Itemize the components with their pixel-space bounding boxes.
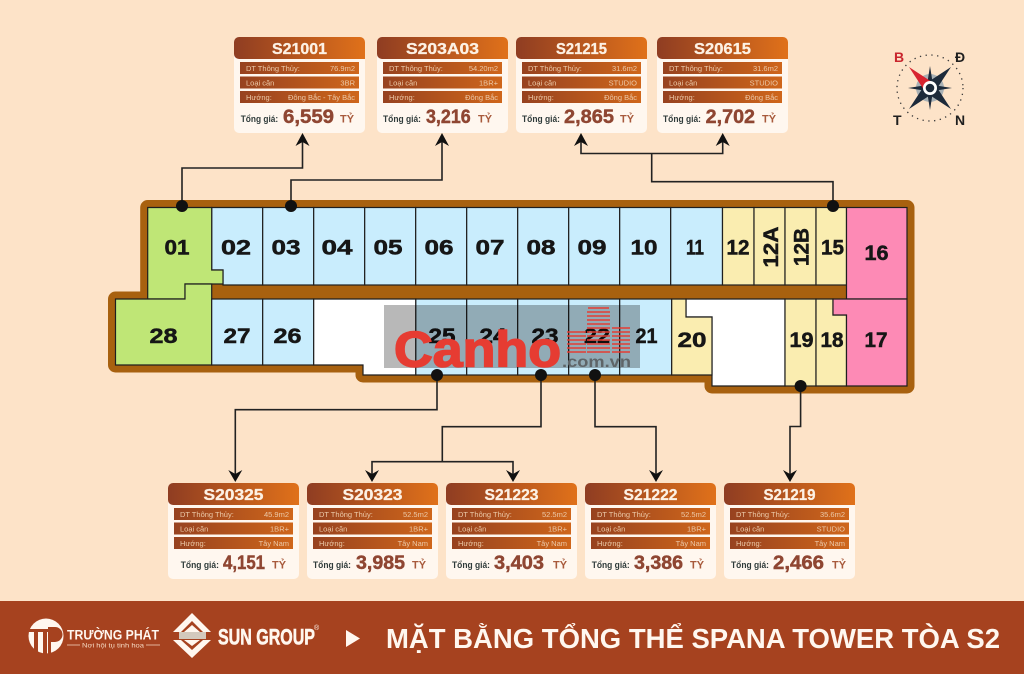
card: S21215: TỶ [620, 112, 635, 126]
card: S21215: S21215 [556, 41, 607, 58]
card: S21223: TỶ [553, 558, 568, 572]
unit numbers: 25 [428, 325, 456, 348]
card: S20325: DT Thông Thủy: [180, 510, 234, 519]
compass letter B: B [894, 49, 904, 65]
card: S21219: Tổng giá: [731, 560, 769, 570]
card: S21222: S21222 [624, 487, 678, 504]
card: S21219: Hướng: [736, 539, 762, 548]
connector: unit 25 to S20325 [228, 369, 443, 482]
connector: unit 23 to S20323 and S21223 [365, 369, 547, 482]
connector: unit 03 to S203A03 [285, 133, 449, 212]
card: S20615 [657, 37, 788, 133]
card: S21222: DT Thông Thủy: [597, 510, 651, 519]
floor plan: building [116, 208, 907, 386]
card: S21223: Hướng: [458, 539, 484, 548]
card: S203A03: S203A03 [406, 41, 479, 58]
logo: Sun Group: SUN GROUP [218, 624, 315, 650]
card: S20323: Tổng giá: [313, 560, 351, 570]
unit numbers: 07 [476, 236, 504, 260]
card: S20325: Tây Nam [259, 539, 289, 548]
compass letter N: N [955, 112, 965, 128]
unit numbers: 12A [760, 226, 783, 268]
card: S20325: Loại căn [180, 524, 208, 534]
rooms: green corner units 01 and 28 [116, 208, 223, 365]
unit numbers: 11 [686, 236, 704, 260]
watermark building stripes [567, 308, 630, 352]
card: S203A03: Tổng giá: [383, 114, 421, 124]
card: S20323: 3,985 [356, 553, 405, 574]
card: S20325: Hướng: [180, 539, 206, 548]
card: S20615: TỶ [762, 112, 777, 126]
card: S21001: S21001 [272, 41, 327, 58]
card: S21223: 52.5m2 [542, 510, 567, 519]
unit numbers: 16 [864, 242, 888, 265]
unit numbers: 21 [636, 325, 658, 348]
card: S203A03: DT Thông Thủy: [389, 64, 443, 73]
unit numbers: 08 [526, 236, 556, 260]
unit numbers [150, 226, 888, 352]
compass letter T: T [893, 112, 902, 128]
card: S21219: STUDIO [817, 524, 845, 534]
card: S21215: STUDIO [609, 78, 637, 88]
card: S20323: 52.5m2 [403, 510, 428, 519]
card: S21222: Tây Nam [676, 539, 706, 548]
building outer wall [116, 208, 907, 386]
card: S20615: STUDIO [750, 78, 778, 88]
logo: Trường Phát: TRƯỜNG PHÁT [67, 628, 160, 642]
card: S21215: Hướng: [528, 93, 554, 102]
card: S21223: Tổng giá: [452, 560, 490, 570]
card: S21215 [516, 37, 647, 133]
card: S21219: DT Thông Thủy: [736, 510, 790, 519]
logo: Sun Group [173, 613, 320, 658]
card: S21001: TỶ [340, 112, 355, 126]
unit numbers: 09 [578, 236, 606, 260]
card: S21001: Đông Bắc - Tây Bắc [288, 93, 355, 102]
footer title: MẶT BẰNG TỔNG THỂ SPANA TOWER TÒA S2 [386, 623, 1000, 654]
icon: compass rose [893, 49, 965, 128]
card: S20325: 45.9m2 [264, 510, 289, 519]
card: S21215: Tổng giá: [522, 114, 560, 124]
unit numbers: 17 [864, 329, 888, 352]
card: S21219: Loại căn [736, 524, 764, 534]
card: S20325: 1BR+ [270, 524, 290, 534]
card: S203A03: TỶ [478, 112, 493, 126]
logo: Trường Phát [28, 618, 160, 654]
card: S21215: Đông Bắc [604, 93, 637, 102]
card: S21222: Tổng giá: [592, 560, 630, 570]
card: S20615: Đông Bắc [745, 93, 778, 102]
card: S203A03: Đông Bắc [465, 93, 498, 102]
card: S203A03: Hướng: [389, 93, 415, 102]
white void areas [314, 299, 785, 386]
rooms row: bottom blue units [212, 299, 672, 375]
card: S21222: Loại căn [597, 524, 625, 534]
card: S21219: S21219 [764, 487, 816, 504]
logo: Sun Group: ® [314, 624, 320, 632]
footer band [0, 601, 1024, 674]
card: S20323: S20323 [342, 487, 403, 504]
card: S20325: 4,151 [223, 553, 265, 574]
card: S21222: Hướng: [597, 539, 623, 548]
card: S21215: DT Thông Thủy: [528, 64, 582, 73]
rooms: pink units 16 and 17 [833, 208, 907, 386]
card: S20615: 31.6m2 [753, 64, 778, 73]
unit numbers: 12 [726, 236, 750, 260]
card: S203A03: Loại căn [389, 78, 417, 88]
card: S20325: Tổng giá: [181, 560, 219, 570]
connector: unit 15 to S21215 and S20615 [574, 133, 839, 212]
compass letter Đ: Đ [955, 49, 965, 65]
card: S21001: 3BR [340, 78, 356, 88]
unit numbers: 20 [678, 329, 706, 352]
card: S21219: TỶ [832, 558, 847, 572]
unit numbers: 03 [272, 236, 300, 260]
card: S21222: TỶ [690, 558, 705, 572]
card: S21222: 1BR+ [687, 524, 707, 534]
unit numbers: 15 [821, 236, 844, 260]
unit numbers: 19 [790, 329, 814, 352]
card: S21223: Loại căn [458, 524, 486, 534]
connector: unit 01 to S21001 [176, 133, 310, 212]
rooms: bottom yellow units [672, 299, 846, 386]
card: S21001: Tổng giá: [241, 114, 278, 124]
card: S21222 [585, 483, 716, 579]
card: S21001: Hướng: [246, 93, 272, 102]
card: S21223 [446, 483, 577, 579]
card: S203A03: 54.20m2 [469, 64, 498, 73]
unit numbers: 05 [374, 236, 403, 260]
card: S21223: Tây Nam [537, 539, 567, 548]
watermark domain: .com.vn [562, 354, 631, 371]
card: S203A03: 3,216 [426, 107, 471, 128]
unit numbers: 02 [221, 236, 251, 260]
card: S21215: Loại căn [528, 78, 556, 88]
card: S20325: TỶ [272, 558, 287, 572]
unit numbers: 06 [424, 236, 454, 260]
unit numbers: 27 [224, 325, 250, 348]
card: S21219: Tây Nam [815, 539, 845, 548]
card: S21223: 1BR+ [548, 524, 568, 534]
card: S20323: 1BR+ [409, 524, 429, 534]
card: S20323: Tây Nam [398, 539, 428, 548]
card: S21001: 76.9m2 [330, 64, 355, 73]
card: S21222: 52.5m2 [681, 510, 706, 519]
card: S20615: S20615 [694, 41, 751, 58]
card: S20325 [168, 483, 299, 579]
icon: play arrow [346, 630, 360, 647]
unit numbers: 04 [322, 236, 353, 260]
unit numbers: 12B [790, 228, 814, 266]
card: S20615: DT Thông Thủy: [669, 64, 723, 73]
card: S20323: TỶ [412, 558, 427, 572]
card: S21001: DT Thông Thủy: [246, 64, 300, 73]
connector: unit 19 to S21219 [783, 380, 807, 482]
unit numbers: 28 [150, 325, 178, 348]
connector: unit 22 to S21222 [589, 369, 663, 482]
watermark: Canho.com.vn [384, 305, 640, 378]
card: S21223: DT Thông Thủy: [458, 510, 512, 519]
card: S20615: Loại căn [669, 78, 697, 88]
card: S20323: Hướng: [319, 539, 345, 548]
unit numbers: 26 [274, 325, 302, 348]
card: S21215: 2,865 [564, 107, 614, 128]
unit numbers: 18 [820, 329, 844, 352]
unit numbers: 10 [630, 236, 658, 260]
rooms row: top yellow units [722, 208, 846, 285]
logo: Trường Phát: Nơi hội tụ tinh hoa [82, 644, 145, 650]
card: S21223: 3,403 [494, 553, 544, 574]
card: S21001: Loại căn [246, 78, 274, 88]
card: S21219: 35.6m2 [820, 510, 845, 519]
unit numbers: 22 [584, 325, 610, 348]
card: S20323: Loại căn [319, 524, 347, 534]
watermark wordmark: Canho [394, 322, 561, 378]
card: S21223: S21223 [484, 487, 539, 504]
card: S21222: 3,386 [634, 553, 683, 574]
card: S20323 [307, 483, 438, 579]
card: S20325: S20325 [204, 487, 264, 504]
card: S21001: 6,559 [283, 107, 334, 128]
unit numbers: 01 [164, 236, 190, 260]
card: S20615: Hướng: [669, 93, 695, 102]
card: S20323: DT Thông Thủy: [319, 510, 373, 519]
unit numbers: 23 [532, 325, 558, 348]
card: S20615: 2,702 [706, 107, 755, 128]
unit numbers: 24 [480, 325, 507, 348]
card: S21219 [724, 483, 855, 579]
card: S203A03 [377, 37, 508, 133]
rooms row: top blue units [212, 208, 722, 285]
card: S21001 [234, 37, 365, 133]
card: S203A03: 1BR+ [479, 78, 499, 88]
card: S21219: 2,466 [773, 553, 824, 574]
card: S20615: Tổng giá: [663, 114, 701, 124]
card: S21215: 31.6m2 [612, 64, 637, 73]
